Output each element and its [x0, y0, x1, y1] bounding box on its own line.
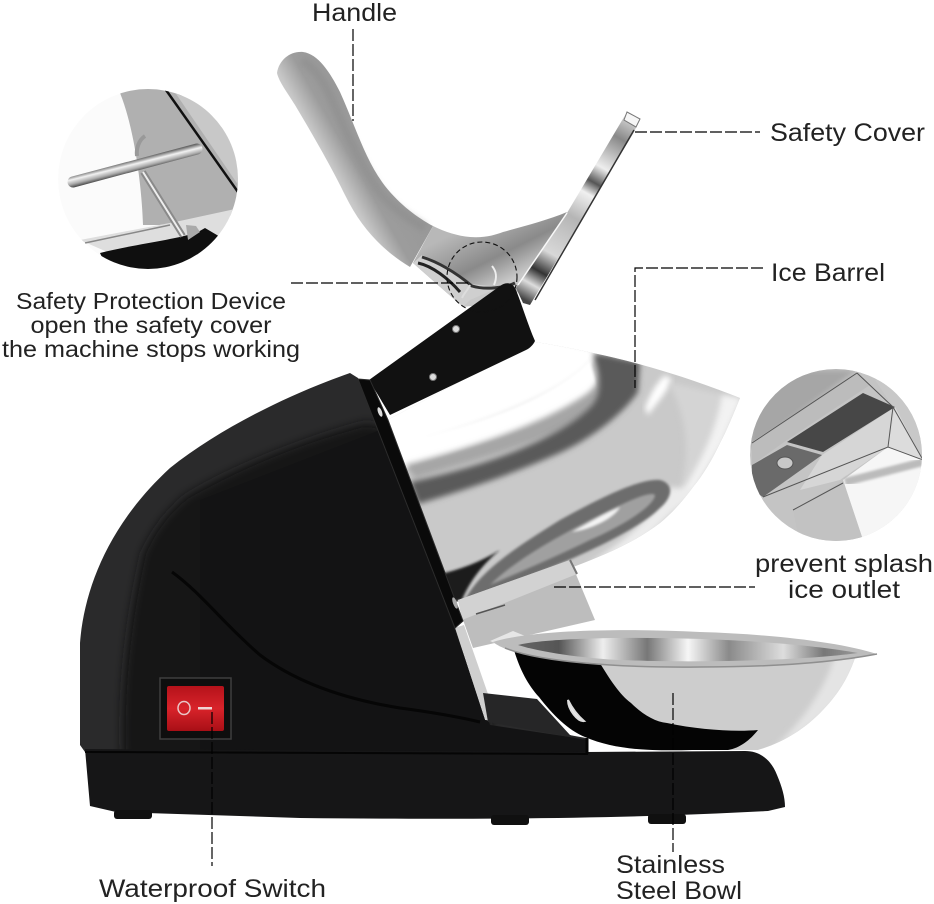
handle [277, 52, 433, 267]
ice barrel [375, 335, 742, 604]
label: Safety Cover: Safety Cover [770, 119, 925, 147]
dashed leader lines [212, 29, 763, 866]
label: prevent splash: prevent splash [755, 550, 933, 578]
label: Safety Protection Device: Safety Protection Device [16, 288, 286, 314]
silver strip [454, 625, 492, 722]
rubber feet [114, 810, 686, 825]
label: Stainless: Stainless [616, 851, 725, 879]
machine body [80, 373, 590, 760]
flange bolts [376, 407, 459, 609]
label: the machine stops working: the machine stops working [2, 336, 300, 362]
black mounting plate [369, 283, 535, 415]
hinge bracket [413, 212, 567, 307]
label: Waterproof Switch: Waterproof Switch [99, 875, 326, 903]
safety cover [516, 112, 640, 305]
plate screw [430, 374, 436, 380]
callout circle: safety device detail [68, 89, 238, 269]
ice outlet with splash guard [458, 560, 595, 650]
machine base [85, 738, 785, 819]
waterproof switch [160, 678, 231, 739]
steel bowl [493, 630, 877, 755]
plate screw [452, 326, 460, 332]
label: open the safety cover: open the safety cover [30, 312, 272, 338]
label: ice outlet: ice outlet [788, 576, 900, 604]
dashed detail circle [447, 242, 517, 312]
black flange [358, 379, 463, 628]
callout circle: prevent splash detail [750, 369, 923, 545]
stand behind bowl [483, 693, 586, 740]
label: Ice Barrel: Ice Barrel [771, 259, 885, 287]
